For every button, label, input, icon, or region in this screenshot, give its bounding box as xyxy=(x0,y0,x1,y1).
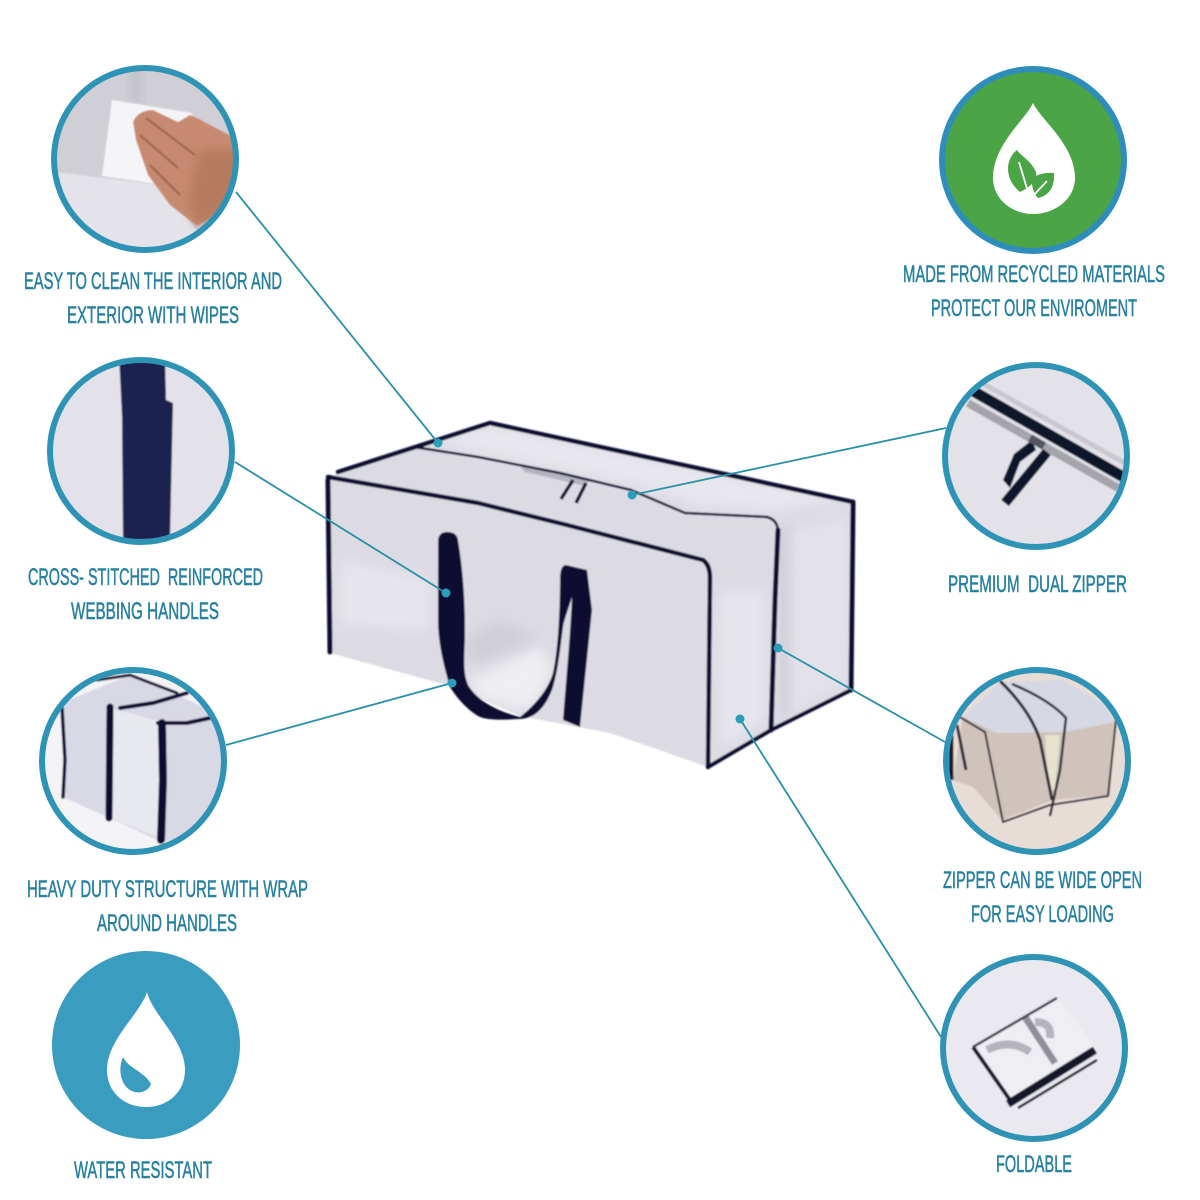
connector: wide open zipper to bag xyxy=(774,644,945,742)
caption line 2: AROUND HANDLES xyxy=(97,910,237,937)
ring xyxy=(943,957,1125,1139)
main product: clear storage bag xyxy=(328,422,855,767)
panel: foldable xyxy=(938,952,1133,1178)
handles xyxy=(438,532,592,727)
caption: WATER RESISTANT xyxy=(74,1157,212,1184)
caption line 1: HEAVY DUTY STRUCTURE WITH WRAP xyxy=(27,876,308,903)
connector: wipes to bag xyxy=(236,192,442,448)
panel: easy to clean xyxy=(24,60,282,329)
photo: folded bag xyxy=(946,960,1122,1136)
panel: recycled materials xyxy=(903,69,1165,322)
connector: zipper to bag xyxy=(628,428,946,500)
green disc xyxy=(942,69,1124,251)
zipper pulls xyxy=(561,480,586,503)
icon: drop inner swirl xyxy=(120,1057,151,1092)
ring xyxy=(946,670,1128,852)
caption line 2: FOR EASY LOADING xyxy=(971,901,1114,928)
bag surface shading xyxy=(340,425,850,750)
icon: large leaf xyxy=(1008,150,1036,192)
caption line 1: EASY TO CLEAN THE INTERIOR AND xyxy=(24,268,282,295)
bag body xyxy=(328,422,855,767)
panel: wide open zipper xyxy=(940,665,1142,928)
photo: zipper closeup xyxy=(948,368,1124,544)
connector: handles to bag xyxy=(235,462,450,598)
blue disc xyxy=(52,951,240,1139)
photo: bag corner with piping xyxy=(45,673,221,849)
photo: open bag with bedding xyxy=(949,673,1125,849)
panel: dual zipper xyxy=(940,360,1135,598)
ring xyxy=(50,360,232,542)
connector: foldable to bag xyxy=(736,714,941,1037)
icon: small leaf xyxy=(1032,173,1054,198)
ring xyxy=(945,365,1127,547)
icon: white drop xyxy=(107,992,185,1107)
bag edge piping xyxy=(328,423,853,767)
caption line 2: WEBBING HANDLES xyxy=(71,598,219,625)
caption line 1: CROSS- STITCHED REINFORCED xyxy=(28,564,263,591)
ring xyxy=(42,670,224,852)
connector: structure to bag xyxy=(226,678,456,745)
caption line 2: EXTERIOR WITH WIPES xyxy=(67,302,239,329)
panel: reinforced handles xyxy=(28,355,263,625)
icon: white drop xyxy=(993,103,1075,214)
panel: heavy duty structure xyxy=(27,665,308,937)
leaf veins xyxy=(1019,162,1047,197)
ring xyxy=(54,68,236,250)
photo: hand wiping bag xyxy=(57,71,233,247)
photo: webbing handle xyxy=(53,363,229,539)
panel: water resistant xyxy=(52,951,240,1184)
caption: FOLDABLE xyxy=(996,1151,1072,1178)
